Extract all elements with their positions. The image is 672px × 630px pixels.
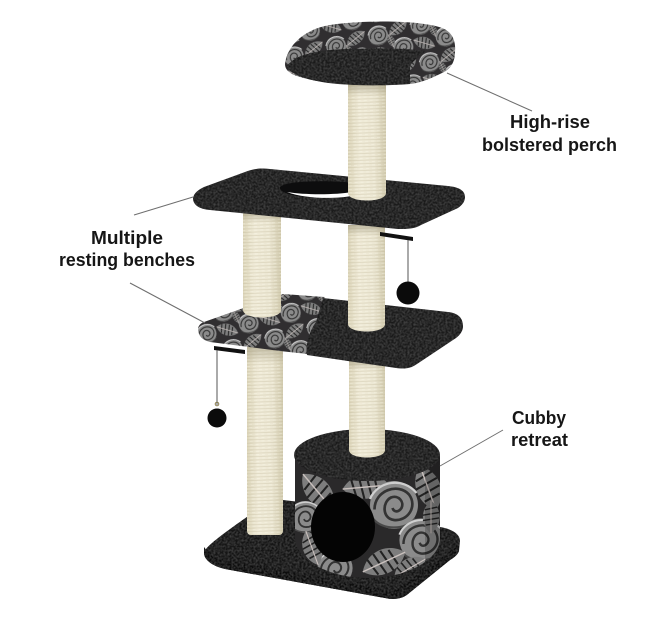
left lower scratching post [247,345,283,535]
perch floral bolster [285,22,455,84]
opening highlight [287,192,352,198]
right middle scratching post [348,225,385,332]
label: multiple resting benches: resting benches [59,249,195,270]
leader line: middle bench [130,283,205,323]
bench floral section [198,294,325,354]
top resting bench with opening [193,168,465,229]
perch plush cushion [286,48,425,85]
perch scratching post [348,82,386,202]
right lower scratching post [349,360,385,458]
bench opening [280,181,360,198]
leader line: cubby [440,430,503,466]
label: high-rise bolstered perch: High-rise [510,111,590,132]
cubby wall side shading [425,458,440,562]
cubby plush top [294,429,440,481]
leader line: perch [447,73,532,111]
label: multiple resting benches: Multiple [91,227,163,248]
cubby retreat [294,430,440,578]
label: high-rise bolstered perch: bolstered perch [482,134,617,155]
middle resting bench [198,294,463,369]
cat tree [193,22,465,599]
right toy bar and hanging ball [380,232,420,304]
label: cubby retreat: Cubby [512,407,567,428]
label: cubby retreat: retreat [511,429,568,450]
infographic: cat tree features [60,22,616,599]
left upper scratching post [243,212,281,318]
leader line: top bench [134,197,193,215]
label: cubby retreat [511,407,568,450]
cubby floral wall [295,456,440,578]
cubby entrance [311,492,375,562]
left toy bar and hanging ball [208,346,245,428]
base platform [204,500,460,599]
label: high-rise bolstered perch [482,111,617,155]
label: multiple resting benches [59,227,195,270]
bench plush section [307,298,463,369]
high-rise bolstered perch [285,22,455,85]
